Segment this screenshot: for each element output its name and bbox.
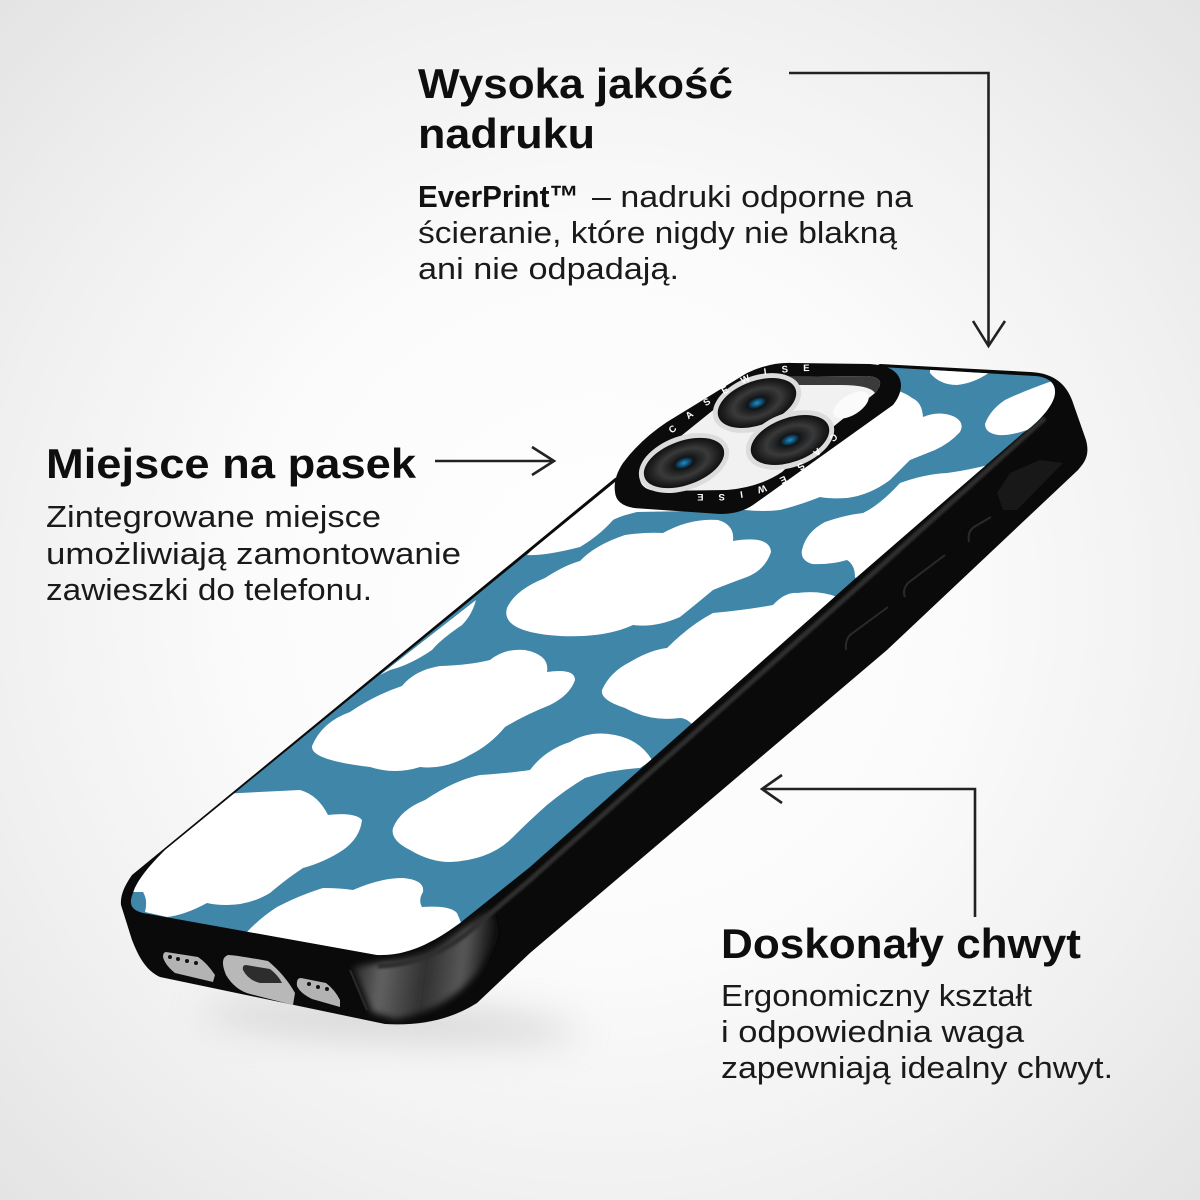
body text: Ergonomiczny kształt — [721, 978, 1032, 1013]
cloud top right — [985, 382, 1055, 436]
case body — [121, 364, 1087, 1024]
button lower — [846, 607, 888, 650]
callout: print quality — [418, 60, 914, 286]
inner rim shade — [745, 376, 880, 393]
body text: zapewniają idealny chwyt. — [721, 1050, 1113, 1085]
body text: zawieszki do telefonu. — [46, 572, 372, 607]
cloud left centre — [312, 650, 575, 771]
body text — [721, 978, 1113, 1085]
camera island — [614, 362, 901, 514]
cloud by camera — [527, 385, 962, 555]
lens top — [705, 362, 809, 444]
left speaker — [163, 952, 215, 982]
back panel with cloud pattern — [130, 367, 1055, 956]
body text — [418, 179, 914, 286]
button small — [969, 517, 991, 542]
arrow: print quality — [789, 73, 1005, 346]
heading: nadruku — [418, 110, 595, 157]
camera opening — [639, 376, 880, 491]
flash — [829, 386, 873, 424]
button large — [904, 555, 945, 597]
lens left — [631, 422, 737, 504]
side switch — [997, 460, 1063, 510]
brand text top: CASEWISE — [669, 364, 810, 432]
callout: grip — [721, 920, 1113, 1085]
arrow: strap slot — [435, 447, 554, 475]
cloud centre — [506, 520, 771, 636]
arrow: grip — [762, 775, 975, 917]
body text: umożliwiają zamontowanie — [46, 536, 461, 571]
body text: ścieranie, które nigdy nie blakną — [418, 215, 898, 250]
cloud right — [802, 466, 986, 578]
side lip highlight — [378, 418, 1045, 966]
lens right — [738, 399, 842, 481]
camera frame — [615, 363, 901, 514]
sliver left — [380, 600, 476, 675]
charging port — [223, 955, 295, 1005]
brand text bottom: CASEWISE — [698, 434, 837, 500]
heading: Doskonały chwyt — [721, 920, 1081, 967]
body text: Zintegrowane miejsce — [46, 499, 381, 534]
heading: Wysoka jakość — [418, 60, 733, 107]
heading — [418, 60, 733, 157]
cloud bottom left — [133, 790, 362, 917]
cloud top — [930, 370, 988, 385]
right speaker — [297, 978, 340, 1007]
body text — [46, 499, 461, 607]
cloud right centre — [602, 592, 836, 724]
phone case — [120, 362, 1088, 1024]
phone shadow — [199, 994, 581, 1050]
glossy corner — [353, 910, 498, 1019]
cloud bottom — [247, 878, 461, 956]
body text: EverPrint™ — [418, 179, 579, 214]
body text: – nadruki odporne na — [592, 179, 914, 214]
heading: Miejsce na pasek — [46, 440, 417, 487]
body text: i odpowiednia waga — [721, 1014, 1025, 1049]
body text: ani nie odpadają. — [418, 251, 679, 286]
cloud lower centre — [393, 734, 652, 862]
corner seam — [350, 970, 367, 1010]
callout: strap slot — [46, 440, 461, 607]
